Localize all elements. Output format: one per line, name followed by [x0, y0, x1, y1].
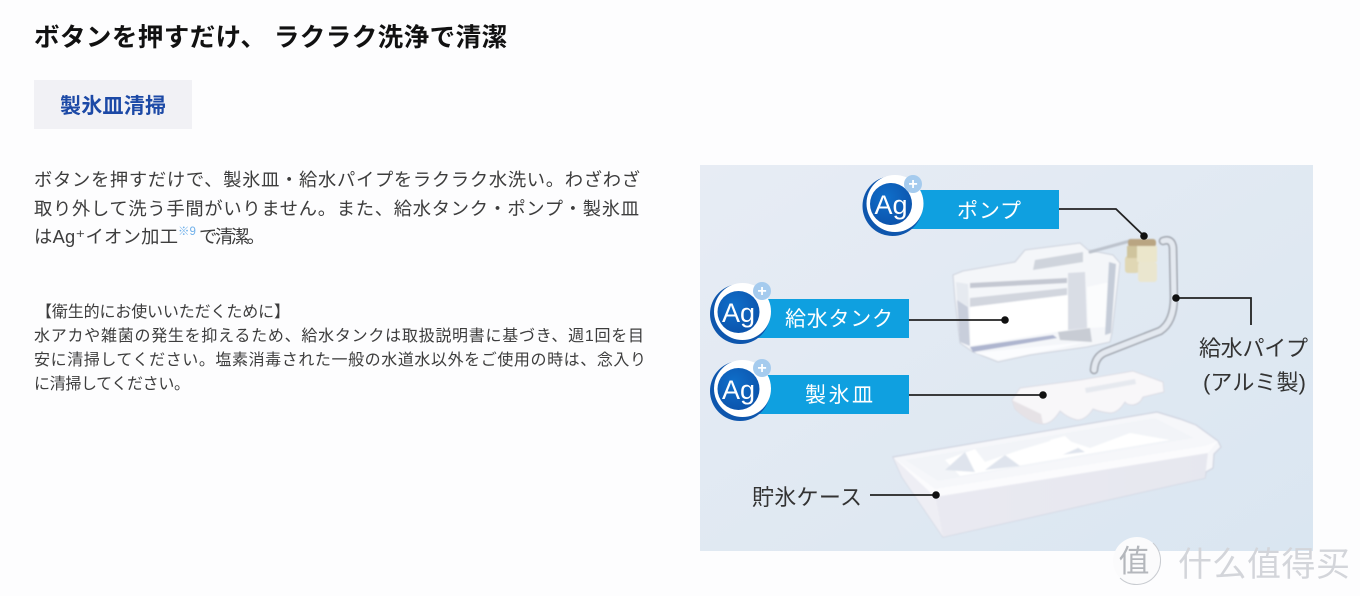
text block: description: はAg⁺イオン加工	[34, 226, 178, 247]
text block: description: ※9	[178, 226, 196, 238]
label: pump: ポンプ	[957, 200, 1021, 223]
illustration: ice storage case	[893, 412, 1221, 537]
text block: hygiene note: に清掃してください。	[34, 375, 190, 393]
label: water supply pipe: (アルミ製)	[1203, 370, 1306, 395]
label: ice tray: +	[757, 360, 767, 377]
label: water supply pipe: 給水パイプ	[1199, 336, 1308, 361]
watermark	[1113, 537, 1350, 585]
illustration: ice tray	[1012, 371, 1164, 424]
leader lines	[870, 209, 1251, 495]
label: water tank	[710, 282, 909, 344]
label: water tank: +	[757, 283, 767, 300]
label: ice storage case: 貯氷ケース	[752, 485, 862, 510]
leader dots	[932, 232, 1180, 499]
label: ice tray	[710, 359, 909, 421]
label: water tank: Ag	[722, 298, 755, 328]
panel: diagram background	[700, 165, 1313, 551]
label: ice tray: Ag	[722, 375, 755, 405]
watermark: 什么值得买	[1178, 546, 1350, 584]
text block: description: 取り外して洗う手間がいりません。また、給水タンク・ポンプ・製氷皿	[34, 198, 639, 219]
illustration: water supply pipe	[1090, 240, 1174, 370]
text block: hygiene note: 【衛生的にお使いいただくために】	[36, 303, 290, 321]
label: ice tray: 製氷皿	[805, 384, 873, 407]
illustration: pump	[1125, 239, 1157, 282]
text block: hygiene note	[34, 303, 646, 393]
button: ice tray cleaning: 製氷皿清掃	[60, 95, 166, 118]
label: water tank: 給水タンク	[785, 308, 893, 331]
title: ボタンを押すだけ、 ラクラク洗浄で清潔	[34, 24, 507, 52]
text block: description: ボタンを押すだけで、製氷皿・給水パイプをラクラク水洗い。わざわざ	[34, 169, 640, 190]
label: pump: +	[908, 176, 918, 193]
text block: hygiene note: 安に清掃してください。塩素消毒された一般の水道水以外をご使用の時は、念入り	[34, 351, 646, 369]
text block: hygiene note: 水アカや雑菌の発生を抑えるため、給水タンクは取扱説明書に基づき、週1回を目	[34, 327, 644, 345]
text block: description	[34, 169, 640, 247]
illustration: water tank	[953, 243, 1120, 362]
text block: description: で清潔。	[199, 226, 265, 247]
button: ice tray cleaning	[34, 80, 192, 129]
label: pump	[862, 175, 1059, 236]
label: pump: Ag	[874, 190, 908, 220]
watermark: 值	[1118, 544, 1150, 579]
label: water supply pipe	[1199, 336, 1308, 395]
